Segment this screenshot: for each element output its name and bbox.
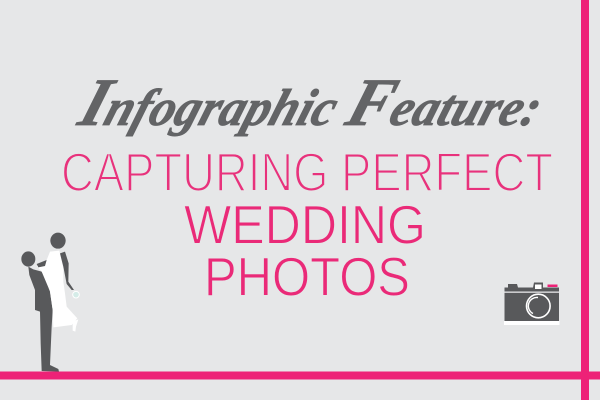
bride head and arm [37,233,74,290]
icon: wedding couple silhouette [21,233,79,372]
icon: camera [504,282,560,325]
bride dress [37,251,77,327]
bouquet [73,291,79,298]
heading: photos: PHOTOS [204,246,410,308]
bride shoe [73,319,78,332]
title: script line: Infographic Feature: [70,66,554,141]
groom [21,251,63,372]
heading: wedding: WEDDING [184,193,426,255]
